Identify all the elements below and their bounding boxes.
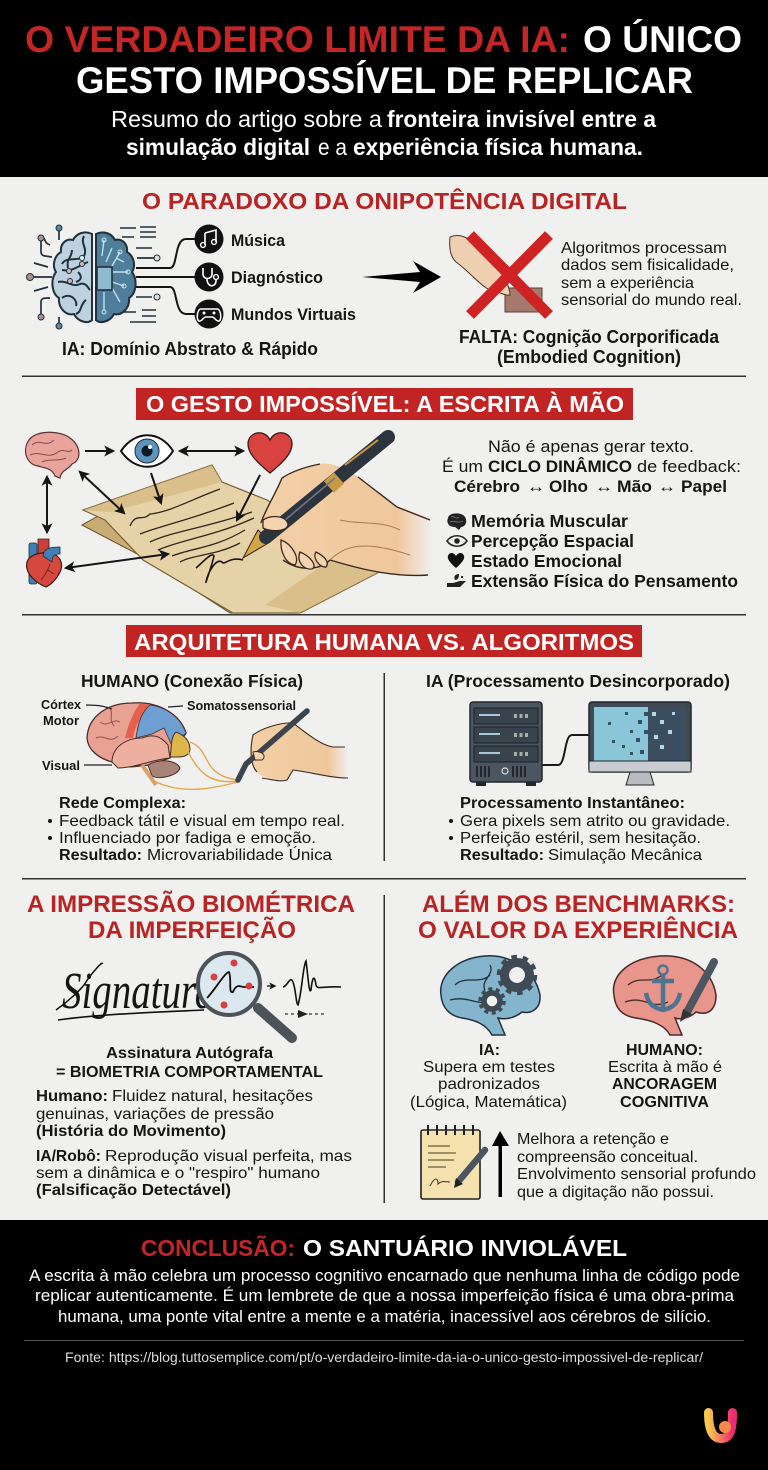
icon: hand plant: [447, 574, 466, 587]
text: ciclo dinâmico: Olho: [549, 477, 588, 496]
cycle arrows: [47, 451, 260, 568]
text: processamento: Simulação Mecânica: [548, 847, 702, 864]
icon: logo: [708, 1412, 732, 1438]
text: humano: genuinas, variações de pressão: [36, 1106, 274, 1123]
item: memória: Memória Muscular: [471, 511, 628, 531]
text: ciclo dinâmico: CICLO DINÂMICO: [488, 457, 632, 476]
text: ciclo dinâmico: Mão: [617, 477, 652, 496]
heading: conclusão: O SANTUÁRIO INVIOLÁVEL: [303, 1234, 627, 1261]
text: melhora: que a digitação não possui.: [517, 1184, 714, 1201]
text: processamento: Gera pixels sem atrito ou gravidade.: [460, 813, 730, 830]
icon: mini eye: [447, 536, 467, 546]
icon: music: [194, 224, 224, 254]
text: conclusão: replicar autenticamente. É um lembrete de que a nossa imperfeição física é uma obra-prima: [35, 1286, 735, 1305]
icon: anatomical heart: [27, 539, 62, 587]
text: humano ancoragem: ANCORAGEM: [612, 1076, 717, 1093]
text: humano: Fluidez natural, hesitações: [112, 1088, 313, 1105]
subtitle: [111, 106, 656, 160]
heading: benchmarks: ALÉM DOS BENCHMARKS:: [422, 890, 735, 918]
text: ia robô: IA/Robô:: [36, 1148, 101, 1165]
source: Fonte: https://blog.tuttosemplice.com/pt/o-verdadeiro-limite-da-ia-o-unico-gesto-impossivel-de-replicar/: [65, 1350, 703, 1365]
text: humano: Humano:: [36, 1088, 108, 1105]
text: ciclo dinâmico: É um: [442, 457, 483, 476]
text: ia robô: sem a dinâmica e o "respiro" humano: [36, 1165, 320, 1182]
text: rede complexa: Rede Complexa:: [59, 795, 186, 812]
arrow: up: [492, 1131, 509, 1197]
icon: notepad: [421, 1125, 485, 1199]
heading: impressão: A IMPRESSÃO BIOMÉTRICA: [27, 890, 355, 918]
fingers: [263, 517, 327, 569]
icon: crossed hand: [450, 235, 549, 315]
text: ciclo dinâmico: Papel: [681, 477, 727, 496]
illustration: server and monitor: [470, 702, 691, 786]
icon: stethoscope: [194, 262, 224, 292]
text: rede complexa: Feedback tátil e visual em tempo real.: [59, 813, 345, 830]
hand: [261, 464, 432, 576]
text: rede complexa: Influenciado por fadiga e emoção.: [59, 830, 316, 847]
item: percepção: Percepção Espacial: [471, 531, 634, 551]
title: O VERDADEIRO LIMITE DA IA:: [25, 19, 570, 60]
banner: gesto: O GESTO IMPOSSÍVEL: A ESCRITA À MÃO: [146, 390, 624, 417]
label: visual: Visual: [42, 759, 80, 773]
callout: falta: (Embodied Cognition): [497, 347, 681, 367]
text: humano: [36, 1088, 313, 1140]
title: GESTO IMPOSSÍVEL DE REPLICAR: [76, 60, 693, 101]
subtitle: experiência física humana.: [353, 134, 643, 160]
icon: mini heart: [448, 553, 464, 568]
icon: circuit brain: [26, 225, 160, 329]
pen: [243, 437, 388, 558]
text: processamento: Resultado:: [460, 847, 544, 864]
text: conclusão: [29, 1267, 740, 1326]
text: rede complexa: Microvariabilidade Única: [147, 845, 332, 864]
panel: conclusão: [0, 1220, 768, 1470]
panel: benchmarks: [410, 890, 756, 1201]
text: rede complexa: Resultado:: [59, 847, 142, 864]
heading: ia: IA (Processamento Desincorporado): [426, 671, 730, 691]
text: ciclo dinâmico: ↔: [595, 477, 613, 496]
label: mundos virtuais: Mundos Virtuais: [231, 306, 356, 324]
text: humano: (História do Movimento): [36, 1123, 226, 1140]
heading: impressão: [27, 890, 355, 944]
text: biometria: [56, 1045, 323, 1081]
icon: heart: [248, 433, 292, 473]
heading: benchmarks: [418, 890, 738, 944]
text: humano ancoragem: [608, 1042, 722, 1111]
label: córtex motor: [41, 698, 112, 728]
title: [25, 18, 742, 101]
subtitle: fronteira invisível entre a: [387, 106, 656, 132]
text: algoritmos: Algoritmos processam: [561, 240, 727, 257]
heading: benchmarks: O VALOR DA EXPERIÊNCIA: [418, 916, 738, 944]
heading: humano: HUMANO (Conexão Física): [81, 671, 303, 691]
heading: conclusão: CONCLUSÃO:: [141, 1234, 295, 1261]
title: O ÚNICO: [583, 18, 742, 60]
text: algoritmos: sensorial do mundo real.: [561, 292, 742, 309]
text: ia robô: Reprodução visual perfeita, mas: [105, 1148, 352, 1165]
subtitle: Resumo do artigo sobre a: [111, 106, 382, 132]
list: dimensões: [447, 511, 738, 591]
column: ia: [426, 671, 730, 864]
text: algoritmos: [561, 240, 742, 309]
panel: gesto: [26, 388, 741, 613]
icon: eye: [121, 435, 173, 467]
banner: arquitetura: ARQUITETURA HUMANA VS. ALGORITMOS: [134, 629, 634, 655]
text: ciclo dinâmico: Não é apenas gerar texto.: [488, 437, 694, 456]
text: ciclo dinâmico: [442, 437, 741, 496]
text: melhora: [517, 1131, 756, 1201]
panel: paradoxo: [26, 187, 742, 367]
label: córtex motor: Córtex: [41, 698, 81, 712]
connector lines: [136, 239, 197, 314]
text: ciclo dinâmico: ↔: [658, 477, 676, 496]
illustration: human brain and hand: [87, 703, 348, 789]
text: ia supera: IA:: [479, 1042, 500, 1059]
callout: falta: FALTA: Cognição Corporificada: [459, 327, 720, 347]
caption: ia domínio: IA: Domínio Abstrato & Rápido: [62, 339, 318, 359]
label: diagnóstico: Diagnóstico: [231, 269, 323, 287]
icon: game controller: [194, 300, 224, 328]
text: ia supera: Supera em testes: [423, 1059, 555, 1076]
panel: arquitetura: [41, 625, 730, 864]
illustration: writing cycle: [26, 432, 432, 613]
illustration: signature magnifier: [56, 953, 341, 1038]
text: ciclo dinâmico: ↔: [527, 477, 545, 496]
callout: falta: [459, 327, 720, 367]
item: extensão: Extensão Física do Pensamento: [471, 571, 738, 591]
text: processamento: Processamento Instantâneo:: [460, 795, 685, 812]
text: processamento: Perfeição estéril, sem hesitação.: [460, 830, 701, 847]
column: humano: [41, 671, 348, 864]
text: melhora: Melhora a retenção e: [517, 1131, 669, 1148]
text: rede complexa: [48, 795, 345, 864]
subtitle: e a: [318, 134, 347, 160]
label: visual: [42, 759, 112, 773]
text: ia supera: padronizados: [438, 1076, 540, 1093]
text: ia supera: (Lógica, Matemática): [410, 1094, 567, 1111]
label: somatossensorial: Somatossensorial: [187, 699, 296, 713]
label: música: Música: [231, 232, 286, 250]
subtitle: simulação digital: [126, 134, 310, 160]
text: ia robô: (Falsificação Detectável): [36, 1182, 231, 1199]
text: ia supera: [410, 1042, 567, 1111]
text: biometria: Assinatura Autógrafa: [106, 1045, 273, 1062]
heading: impressão: DA IMPERFEIÇÃO: [88, 916, 296, 944]
text: algoritmos: dados sem fisicalidade,: [561, 257, 734, 274]
header panel: [0, 0, 768, 177]
text: algoritmos: sem a experiência: [561, 275, 694, 292]
panel: impressão biométrica: [27, 890, 355, 1199]
text: conclusão: humana, uma ponte vital entre a mente e a matéria, inacessível aos cérebros de silício.: [58, 1308, 711, 1326]
text: conclusão: A escrita à mão celebra um processo cognitivo encarnado que nenhuma linha de código pode: [29, 1267, 740, 1285]
label: córtex motor: Motor: [43, 714, 79, 728]
illustration: signature magnifier: Signature: [62, 963, 212, 1020]
arrow: to missing: [362, 261, 441, 293]
text: processamento: [449, 795, 730, 864]
text: melhora: Envolvimento sensorial profundo: [517, 1166, 756, 1183]
text: humano ancoragem: Escrita à mão é: [608, 1059, 722, 1076]
icon: brain: [26, 432, 79, 478]
text: ciclo dinâmico: Cérebro: [454, 477, 520, 496]
text: melhora: compreensão conceitual.: [517, 1149, 698, 1166]
paper: [82, 465, 383, 613]
icon: blue brain gears: [441, 956, 540, 1035]
text: humano ancoragem: COGNITIVA: [620, 1094, 709, 1111]
text: biometria: = BIOMETRIA COMPORTAMENTAL: [56, 1064, 323, 1081]
text: humano ancoragem: HUMANO:: [626, 1042, 703, 1059]
heading: conclusão: [141, 1234, 627, 1261]
item: estado: Estado Emocional: [471, 551, 622, 571]
heading: paradoxo: O PARADOXO DA ONIPOTÊNCIA DIGITAL: [142, 187, 627, 214]
icon: mini brain: [447, 513, 466, 530]
icon: red brain anchor: [613, 956, 716, 1035]
text: ia robô: [36, 1148, 352, 1199]
text: ciclo dinâmico: de feedback:: [637, 457, 741, 476]
